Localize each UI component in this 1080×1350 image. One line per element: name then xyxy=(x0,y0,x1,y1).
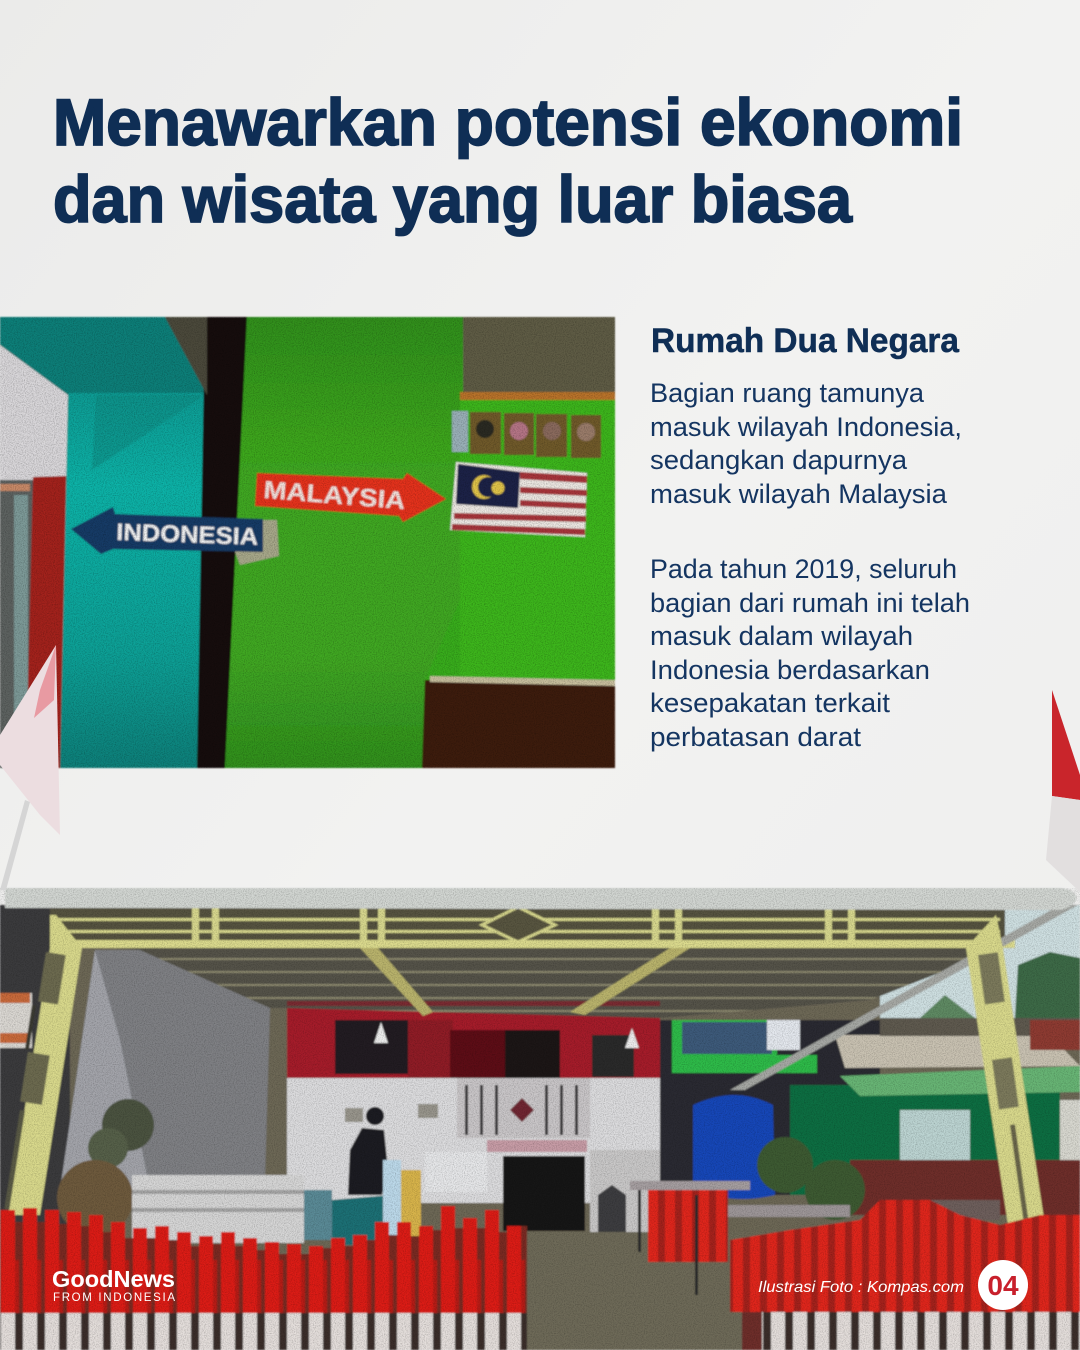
water tank xyxy=(693,1095,775,1199)
counter and plants xyxy=(57,1099,421,1245)
house facade xyxy=(287,1005,660,1232)
title: Menawarkan potensi ekonomi xyxy=(53,85,963,159)
flag of Malaysia xyxy=(450,462,587,537)
left pillar xyxy=(4,915,82,1215)
photo frames xyxy=(452,411,601,458)
page number: 04 xyxy=(987,1270,1019,1301)
tarp xyxy=(60,950,270,1190)
left fence xyxy=(0,1206,527,1350)
photo credit: Ilustrasi Foto : Kompas.com xyxy=(758,1279,964,1296)
person xyxy=(348,1107,388,1195)
green neighbour building xyxy=(660,1018,1080,1215)
flag: left xyxy=(0,645,60,890)
braces xyxy=(360,948,690,1016)
bush xyxy=(757,1137,865,1220)
roof xyxy=(5,888,1076,910)
diagonal steel beam xyxy=(730,905,1078,1090)
right fence xyxy=(730,1200,1080,1350)
logo: FROM INDONESIA xyxy=(53,1292,175,1304)
page number xyxy=(978,1260,1028,1310)
lattice band xyxy=(50,908,1005,942)
flag: right xyxy=(1046,690,1080,892)
panel: border sign photo xyxy=(0,317,615,768)
text block: room location: masuk wilayah Malaysia xyxy=(650,479,948,509)
text block: room location xyxy=(650,378,962,509)
text block: 2019 agreement: masuk dalam wilayah xyxy=(650,621,913,651)
text block: room location: Bagian ruang tamunya xyxy=(650,378,925,408)
sky and background xyxy=(0,905,1080,1350)
right pillar xyxy=(966,915,1045,1225)
yellow frame beam xyxy=(50,940,1015,948)
text block: 2019 agreement: Pada tahun 2019, seluruh xyxy=(650,554,957,584)
text block: room location: sedangkan dapurnya xyxy=(650,445,908,475)
text block: 2019 agreement: perbatasan darat xyxy=(650,722,862,752)
text block: 2019 agreement: Indonesia berdasarkan xyxy=(650,655,930,685)
arrow: Malaysia xyxy=(255,473,446,522)
text block: 2019 agreement: bagian dari rumah ini telah xyxy=(650,588,970,618)
title: dan wisata yang luar biasa xyxy=(53,162,853,236)
text block: 2019 agreement xyxy=(650,554,970,752)
section heading: Rumah Dua Negara xyxy=(651,322,960,360)
arrow: Indonesia xyxy=(71,507,279,565)
text block: 2019 agreement: kesepakatan terkait xyxy=(650,688,891,718)
logo xyxy=(52,1266,175,1304)
arrow: Indonesia: INDONESIA xyxy=(116,519,259,551)
title xyxy=(53,85,963,236)
text block: room location: masuk wilayah Indonesia, xyxy=(650,412,962,442)
arrow: Malaysia: MALAYSIA xyxy=(263,476,406,515)
ceiling xyxy=(82,945,1000,1018)
panel: house photo xyxy=(0,888,1080,1350)
logo: GoodNews xyxy=(52,1266,175,1292)
ground xyxy=(527,1232,742,1350)
red tables and chairs xyxy=(630,1181,1000,1295)
